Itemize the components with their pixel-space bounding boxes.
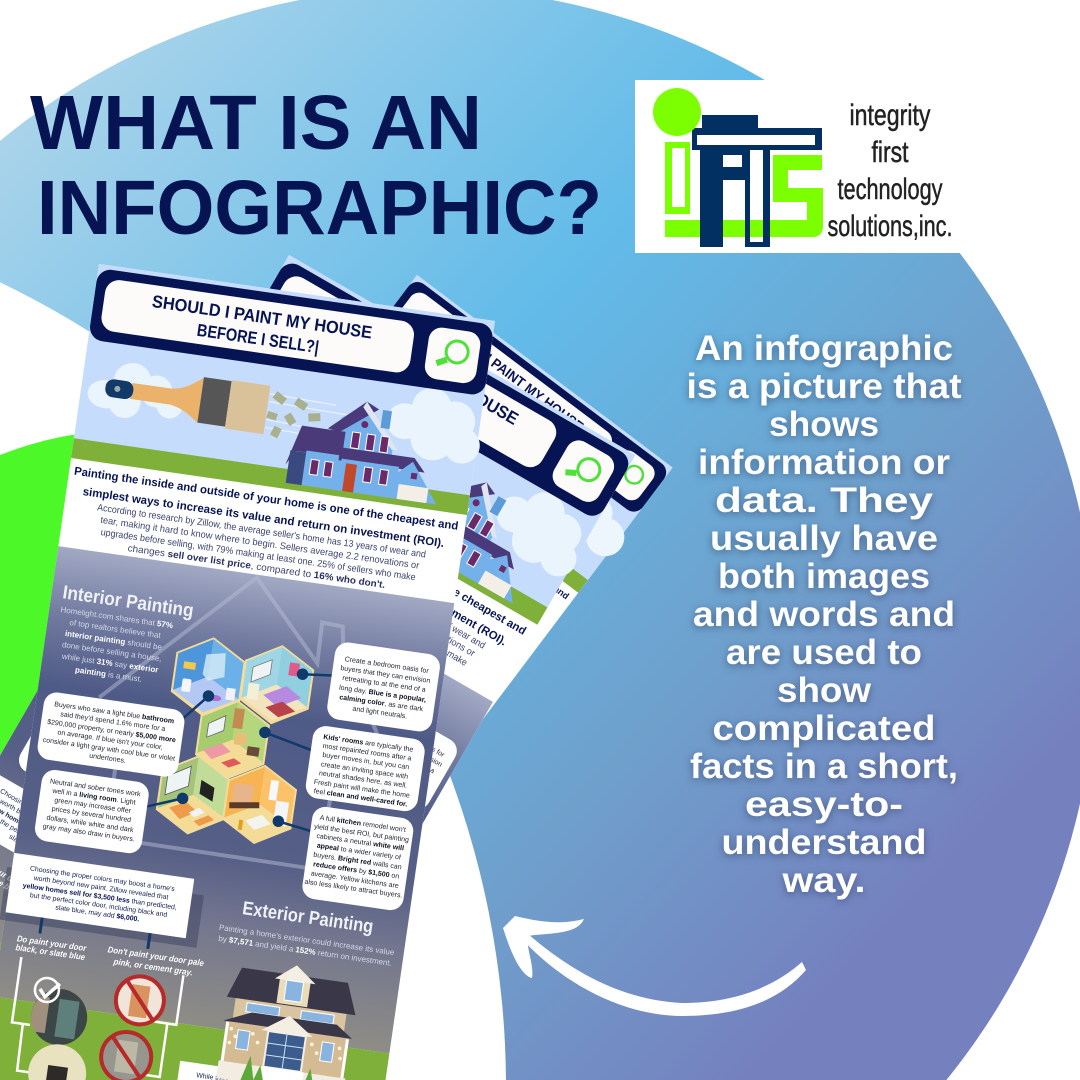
intro body text: According to research by Zillow, the average seller's home has 13 years of wear and xyxy=(96,502,427,561)
door colour note: but the perfect color door, including black and xyxy=(29,892,168,919)
definition text: understand xyxy=(722,823,926,862)
callout: kitchen: A full kitchen remodel won't xyxy=(319,815,406,834)
callout: kids rooms: feel clean and well-cared for. xyxy=(313,788,408,808)
sky xyxy=(73,264,495,499)
back infographic card: SHOULD I PAINT MY HOUSE xyxy=(435,315,587,435)
door photo: pink door with prohibition sign xyxy=(113,973,167,1028)
note ticks xyxy=(40,918,150,949)
main title xyxy=(30,80,602,251)
callout: kids rooms: Kids' rooms are typically the xyxy=(323,734,414,754)
search button xyxy=(423,326,482,385)
callout: kitchen: average. Yellow kitchens are xyxy=(310,870,399,890)
house outline background xyxy=(79,558,399,875)
callout: living room xyxy=(33,768,150,855)
grass strip xyxy=(71,438,470,515)
callout: kids rooms xyxy=(304,724,426,813)
callout: kids rooms: most repainted rooms after a xyxy=(322,743,412,763)
callout: kitchen: reduce offers by $1,500 on xyxy=(313,861,400,881)
icon: paint brush xyxy=(102,362,353,446)
room: bedroom xyxy=(236,640,317,729)
connector lines and dots xyxy=(147,651,333,831)
callout: living room: gray may also draw in buyers. xyxy=(42,823,135,843)
search field xyxy=(100,278,416,374)
callout: bedroom: and light neutrals. xyxy=(352,706,408,721)
intro headline: simplest ways to increase its value and return on investment (ROI). xyxy=(82,486,445,550)
door don't heading xyxy=(106,944,205,979)
callout: bathroom: consider a light gray with cool blue or violet xyxy=(42,737,175,763)
door colour note: Choosing the proper colors may boost a home's xyxy=(29,865,176,893)
definition text: are used to xyxy=(726,633,922,672)
middle infographic card: Create a bedroom oasis for xyxy=(368,710,446,759)
definition text: shows xyxy=(769,405,879,444)
door colour note: worth beyond new paint. Zillow revealed that xyxy=(32,875,169,901)
definition text: data. They xyxy=(715,481,934,520)
door photo: slate door xyxy=(27,985,91,1049)
definition text: facts in a short, xyxy=(690,747,958,786)
middle infographic card: Choosing the proper colors may boost a home's xyxy=(0,788,129,867)
middle infographic card: slate blue, may add $6,000. xyxy=(8,834,85,882)
door don't heading: pink, or cement gray. xyxy=(112,956,194,978)
interior painting paragraph: while just 31% say exterior xyxy=(60,652,159,675)
callout: bedroom: retreating to at the end of a xyxy=(342,675,426,694)
door colour note: slate blue, may add $6,000. xyxy=(55,904,140,923)
background: green circle xyxy=(0,434,74,756)
callout: bathroom: undertones. xyxy=(89,753,126,765)
middle infographic card: simplest ways to increase its value and return on investment (ROI). xyxy=(186,456,508,648)
room: living room xyxy=(153,750,234,839)
heading: should I paint my house: BEFORE I SELL?| xyxy=(196,320,320,357)
interior painting paragraph xyxy=(52,605,173,687)
callout: bedroom: buyers that they can envision xyxy=(340,665,431,685)
bottom note xyxy=(172,1061,329,1080)
callout: bathroom: said they'd spend 1.6% more for a xyxy=(60,711,166,733)
door do heading: Do paint your door xyxy=(16,933,88,953)
callout: living room: well in a living room. Light xyxy=(51,788,136,807)
door don't heading: Don't paint your door pale xyxy=(107,944,205,968)
middle infographic card xyxy=(0,255,638,1080)
logo wordmark: solutions,inc. xyxy=(828,210,952,243)
definition text: is a picture that xyxy=(686,367,962,406)
callout: bedroom: long day. Blue is a popular, xyxy=(339,685,427,704)
door photo: gray door with prohibition sign xyxy=(98,1029,154,1080)
callout: bathroom: on average. If blue isn't your color, xyxy=(57,729,163,752)
room: kids room xyxy=(192,695,273,784)
middle infographic card: SHOULD I PAINT MY HOUSE xyxy=(320,300,522,429)
intro body text: changes sell over list price, compared to 16% who don't. xyxy=(127,543,386,591)
door photo: black door xyxy=(24,1040,90,1080)
logo wordmark: technology xyxy=(838,173,942,206)
heading: should I paint my house xyxy=(148,291,373,364)
logo: integrity first technology solutions xyxy=(635,80,965,253)
definition text: both images xyxy=(718,557,930,596)
card base xyxy=(0,264,495,1080)
intro body text xyxy=(91,502,427,596)
callout: kids rooms: buyer moves in, but you can xyxy=(322,752,410,771)
interior painting heading: Interior Painting xyxy=(61,582,195,622)
logo wordmark: integrity xyxy=(850,99,930,132)
callout: bedroom: Create a bedroom oasis for xyxy=(344,656,430,675)
door colour note xyxy=(0,852,206,948)
main title: WHAT IS AN xyxy=(30,80,482,166)
callout: kitchen: cabinets a neutral white will xyxy=(316,833,404,852)
definition text: show xyxy=(777,671,872,710)
icon: check mark xyxy=(33,976,61,1004)
back infographic card: Painting the inside and outside of your home is one of the cheapest and xyxy=(317,406,571,601)
middle infographic card: worth beyond new paint. Zillow revealed that xyxy=(0,798,120,872)
main title: INFOGRAPHIC? xyxy=(37,165,602,251)
interior painting paragraph: done before selling a house, xyxy=(61,640,162,663)
illustration: blue house xyxy=(283,391,449,505)
exterior painting paragraph: Painting a home's exterior could increase its value xyxy=(218,923,395,957)
callout: kitchen: yield the best ROI, but painting xyxy=(314,823,409,844)
middle infographic card: buyers that they can envision xyxy=(361,717,443,769)
callout: kids rooms: Fresh paint will make the home xyxy=(313,779,410,800)
door brackets xyxy=(5,952,183,1080)
middle infographic card: Painting the inside and outside of your home is one of the cheapest and xyxy=(186,433,528,638)
callout: kitchen: buyers. Bright red walls can xyxy=(313,852,402,871)
icon: flying money xyxy=(263,390,324,444)
callout: kitchen xyxy=(301,805,415,912)
intro body text: tear, making it hard to know where to begin. Sellers average 2.2 renovations or xyxy=(100,515,421,572)
interior painting paragraph: painting is a must. xyxy=(74,665,143,684)
icon: magnifying glass xyxy=(436,338,470,367)
callout: kids rooms: create an inviting space with xyxy=(320,761,409,781)
middle infographic card: retreating to at the end of a xyxy=(359,727,436,775)
search bar header xyxy=(88,268,494,396)
interior painting paragraph: interior painting should be xyxy=(64,629,163,652)
heading: should I paint my house: SHOULD I PAINT MY HOUSE xyxy=(151,291,373,343)
front infographic card: Should I paint my house before I sell xyxy=(0,263,498,1080)
callout: living room: prices by several hundred xyxy=(51,806,132,824)
callout: bedroom: calming color, as are dark xyxy=(339,694,424,713)
callout: living room: green may increase offer xyxy=(54,797,132,815)
background: white circle xyxy=(0,194,506,1080)
exterior painting paragraph: by $7,571 and yield a 152% return on investment. xyxy=(218,934,392,968)
middle infographic card: upgrades before selling, with 79% making at least one. 25% of sellers who make xyxy=(188,500,469,669)
illustration: tan house xyxy=(215,956,361,1080)
door colour note: yellow homes sell for $3,500 less than predicted, xyxy=(22,883,177,912)
door do heading: black, or slate blue xyxy=(15,942,86,962)
door do heading xyxy=(15,933,88,962)
callout: bathroom: $290,000 property, or nearly $5,000 more xyxy=(47,719,176,744)
clouds xyxy=(85,339,487,469)
definition text: usually have xyxy=(710,519,938,558)
callout: bathroom xyxy=(36,691,186,778)
intro headline: Painting the inside and outside of your home is one of the cheapest and xyxy=(73,466,459,533)
back infographic card xyxy=(118,275,678,868)
room: kitchen xyxy=(219,760,300,849)
callout: kitchen: also less likely to attract buyers. xyxy=(304,879,403,900)
definition text: complicated xyxy=(712,709,936,748)
logo wordmark xyxy=(828,99,952,243)
middle infographic card: According to research by Zillow, the average seller's home has 13 years of wear and xyxy=(194,476,487,651)
definition text: and words and xyxy=(693,595,955,634)
callout: kitchen: appeal to a wider variety of xyxy=(316,843,401,862)
definition text: easy-to- xyxy=(745,785,903,824)
callout: kids rooms: neutral shades here, as well. xyxy=(319,770,408,790)
middle infographic card: tear, making it hard to know where to begin. Sellers average 2.2 renovations or xyxy=(192,489,477,660)
exterior painting heading: Exterior Painting xyxy=(241,898,375,938)
callout: living room: Neutral and sober tones work xyxy=(49,778,141,798)
interior painting paragraph: of top realtors believe that xyxy=(69,618,162,640)
intro body text: upgrades before selling, with 79% making at least one. 25% of sellers who make xyxy=(100,527,416,583)
definition text xyxy=(686,329,962,900)
callout: bedroom xyxy=(326,641,442,733)
definition text: way. xyxy=(781,861,866,900)
interior painting paragraph: Homelight.com shares that 57% xyxy=(60,605,173,630)
callout: living room: dollars, while white and dark xyxy=(46,815,134,834)
arrow: curved white arrow pointing to the infographic xyxy=(503,916,806,1016)
definition text: An infographic xyxy=(695,329,953,368)
lawn xyxy=(0,996,389,1080)
logo wordmark: first xyxy=(872,136,909,169)
room: bathroom xyxy=(168,632,249,721)
callout: bathroom: Buyers who saw a light blue bathroom xyxy=(54,701,174,725)
logo mark xyxy=(653,88,823,247)
definition text: information or xyxy=(698,443,950,482)
slate gradient panel xyxy=(0,546,454,1053)
